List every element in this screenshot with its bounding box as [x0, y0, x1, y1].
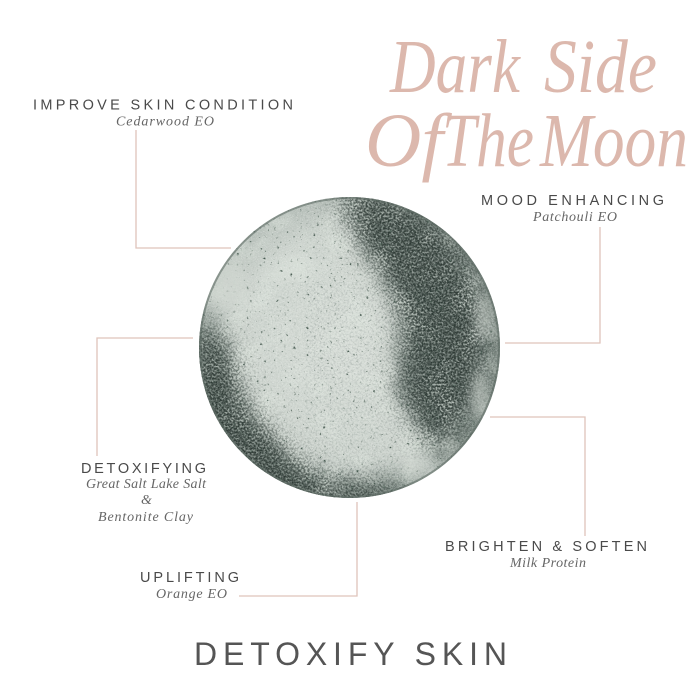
title [365, 25, 688, 183]
label: detoxifying: Bentonite Clay [98, 510, 194, 525]
grain: lower left dark region [190, 320, 400, 510]
title: The [442, 99, 534, 183]
grain: right dark region [335, 190, 485, 445]
title: Of [365, 99, 452, 183]
light mottling [198, 196, 500, 498]
connector: uplifting [239, 502, 357, 596]
footer heading: DETOXIFY SKIN [194, 636, 507, 672]
label: mood enhancing [481, 193, 664, 225]
connector: brighten and soften [490, 417, 585, 536]
label: detoxifying [81, 461, 207, 525]
label: improve skin condition [33, 98, 293, 130]
label: uplifting: UPLIFTING [140, 570, 239, 586]
connector: improve skin condition [136, 130, 231, 248]
label: improve skin condition: Cedarwood EO [116, 114, 214, 130]
connector: detoxifying [97, 338, 193, 456]
label: improve skin condition: IMPROVE SKIN CONDITION [33, 98, 293, 114]
label: detoxifying: & [141, 493, 152, 508]
dark rim [200, 198, 500, 498]
fine highlight grain [198, 196, 500, 498]
soft shadow tone: lower left [199, 308, 424, 498]
label: brighten and soften: BRIGHTEN & SOFTEN [445, 539, 647, 555]
title: Side [544, 25, 657, 109]
title: Dark [389, 25, 521, 109]
connector: mood enhancing [505, 227, 600, 343]
label: detoxifying: Great Salt Lake Salt [86, 477, 207, 492]
soft shadow tone: right side [345, 185, 510, 465]
label: brighten and soften [445, 539, 647, 571]
label: mood enhancing: MOOD ENHANCING [481, 193, 664, 209]
pale rim patches [208, 259, 490, 473]
label: detoxifying: DETOXIFYING [81, 461, 206, 477]
image: bath bomb moon [199, 197, 500, 498]
label: uplifting: Orange EO [156, 587, 227, 602]
label: uplifting [140, 570, 239, 602]
label: brighten and soften: Milk Protein [509, 556, 586, 571]
specks across surface [198, 196, 500, 498]
label: mood enhancing: Patchouli EO [532, 210, 617, 225]
